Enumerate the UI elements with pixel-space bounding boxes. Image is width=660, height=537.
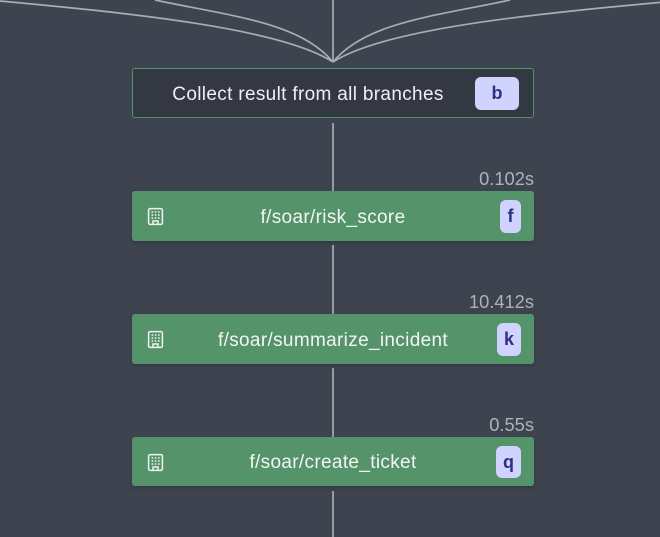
badge q: q xyxy=(503,452,514,472)
building icon xyxy=(148,208,164,226)
node: create ticket xyxy=(132,437,534,486)
badge k xyxy=(497,323,521,356)
node title: f/soar/summarize_incident xyxy=(218,330,448,351)
badge b: b xyxy=(492,83,502,103)
node title: f/soar/risk_score xyxy=(260,207,405,228)
duration 0.55s: 0.55s xyxy=(489,414,534,435)
badge b xyxy=(475,77,519,110)
node title: Collect result from all branches xyxy=(172,84,444,105)
node title: f/soar/create_ticket xyxy=(249,452,417,473)
badge f xyxy=(500,200,521,233)
node: summarize incident xyxy=(132,314,534,364)
badge k: k xyxy=(504,329,514,349)
duration 0.102s: 0.102s xyxy=(479,168,534,189)
node: collect results xyxy=(132,68,534,118)
building icon xyxy=(148,330,164,348)
duration 10.412s: 10.412s xyxy=(469,291,534,312)
badge q xyxy=(496,446,521,478)
building icon xyxy=(148,454,164,472)
node: risk score xyxy=(132,191,534,241)
badge f: f xyxy=(508,206,514,226)
